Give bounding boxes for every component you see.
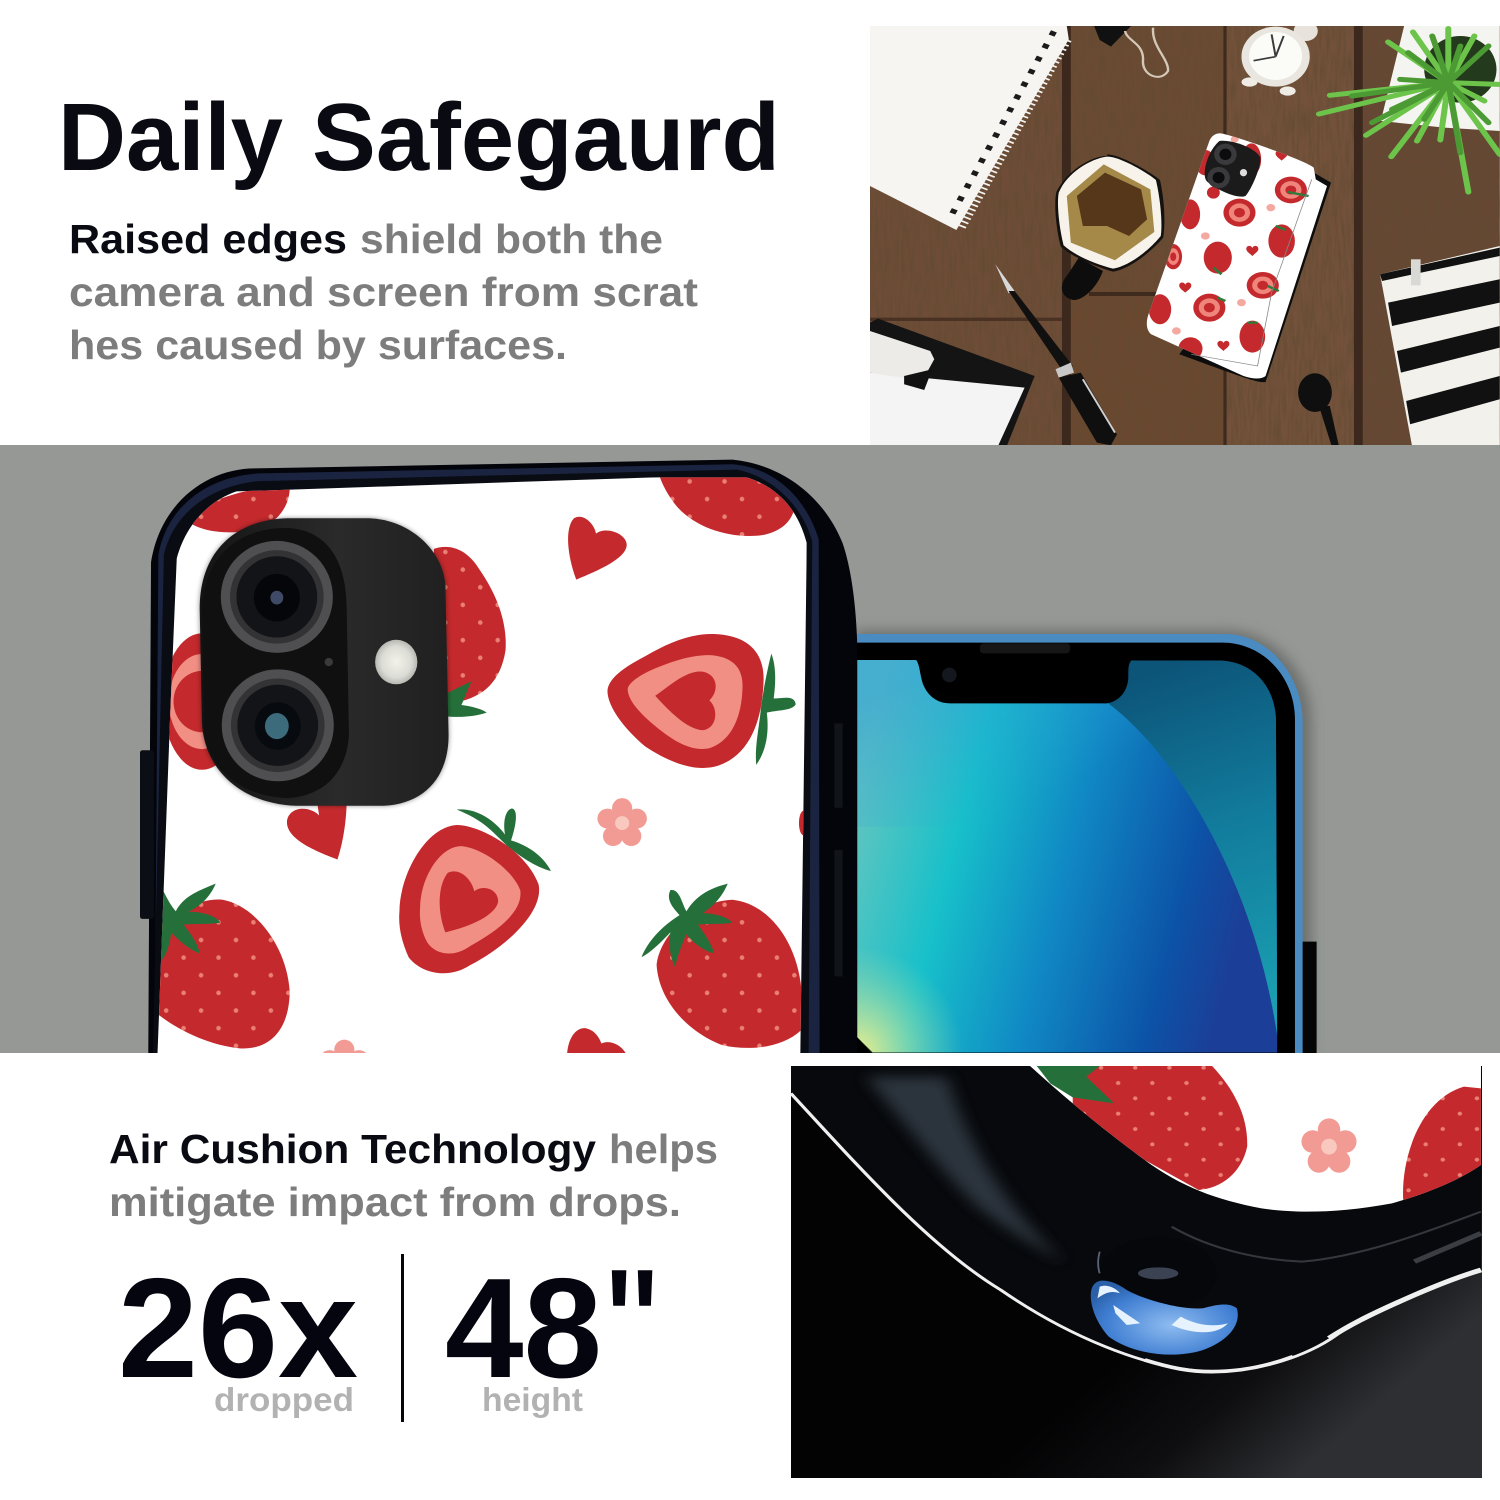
text block: air cushion technology: [109, 1126, 718, 1225]
clock: [1241, 21, 1318, 96]
inner lining: [153, 470, 812, 1057]
notebook: [870, 26, 1069, 230]
pen: [995, 264, 1117, 445]
flash: [375, 640, 417, 684]
slice: centre: [399, 808, 551, 973]
water drop: [1091, 1237, 1238, 1355]
stat: 48 inches height: '': [606, 1240, 658, 1399]
stat: 26x dropped: 26x: [118, 1249, 358, 1408]
photo: corner close-up with water drop: [785, 1060, 1490, 1487]
case printed back: [158, 477, 807, 1053]
strawberry: bottom right: [641, 884, 801, 1048]
strawberry: behind camera: [434, 547, 506, 717]
microphone: [325, 658, 333, 666]
side button: [1302, 942, 1317, 1053]
divider: [401, 1254, 404, 1422]
white edge highlight: [791, 1093, 1481, 1372]
screen wallpaper: [850, 653, 1283, 1057]
upper lens: [221, 541, 333, 653]
notch: [915, 659, 1134, 703]
mini phone case: [1147, 133, 1331, 382]
text block: raised edges description: hes caused by surfaces.: [69, 322, 567, 368]
right side buttons: [834, 723, 843, 976]
blue frame: [856, 634, 1303, 1055]
case bumper: [791, 1066, 1481, 1372]
phone case back: [140, 455, 860, 1088]
title: [58, 84, 780, 191]
lower lens: [222, 669, 334, 781]
front phone with blue frame: [850, 630, 1317, 1057]
heart: right sliver: [798, 810, 804, 836]
text block: raised edges description: shield both the: [360, 216, 663, 262]
left side buttons: [140, 750, 154, 919]
stat: 48 inches height: [445, 1240, 658, 1418]
slice: right: [607, 634, 796, 768]
black bezel: [856, 643, 1295, 1055]
strawberry: top left: [192, 490, 290, 532]
heart: bottom: [567, 1028, 628, 1057]
text block: raised edges description: [69, 216, 698, 368]
stat: 26x dropped: dropped: [214, 1381, 354, 1418]
dark background: [785, 1060, 1490, 1487]
clipboard: [870, 319, 1035, 447]
photo: desk flat lay with phone case: [870, 21, 1500, 447]
text block: air cushion technology: Air Cushion Technology: [109, 1126, 596, 1172]
text block: air cushion technology: mitigate impact from drops.: [109, 1179, 681, 1225]
case black shell: [148, 460, 857, 1057]
stat: 48 inches height: height: [482, 1381, 583, 1418]
case print: [1030, 1066, 1481, 1212]
binder clip: [1094, 26, 1168, 77]
strawberry: top right: [659, 474, 796, 536]
speaker: [980, 643, 1070, 653]
flower: right: [597, 798, 647, 846]
plant: [1319, 26, 1500, 192]
wood planks: [870, 26, 1500, 446]
navy frame: [155, 464, 820, 1057]
heart: top: [568, 517, 627, 580]
spoon: [1298, 373, 1339, 447]
text block: raised edges description: Raised edges: [69, 216, 347, 262]
stat: 48 inches height: 48: [445, 1249, 602, 1408]
coffee cup: [1055, 154, 1164, 300]
strawberry: bottom left: [154, 884, 290, 1049]
phone shadow: [856, 625, 1316, 942]
front camera: [942, 668, 957, 682]
flower: bottom: [320, 1040, 369, 1088]
gray product band: [0, 445, 1500, 1053]
striped book: [1380, 246, 1500, 447]
title: Safegaurd: [312, 84, 780, 191]
text block: air cushion technology: helps: [609, 1126, 718, 1172]
camera module: [200, 518, 449, 806]
title: Daily: [58, 84, 283, 191]
slice: left partial: [169, 633, 216, 770]
text block: raised edges description: camera and screen from scrat: [69, 269, 698, 315]
heart: below camera: [287, 800, 347, 859]
